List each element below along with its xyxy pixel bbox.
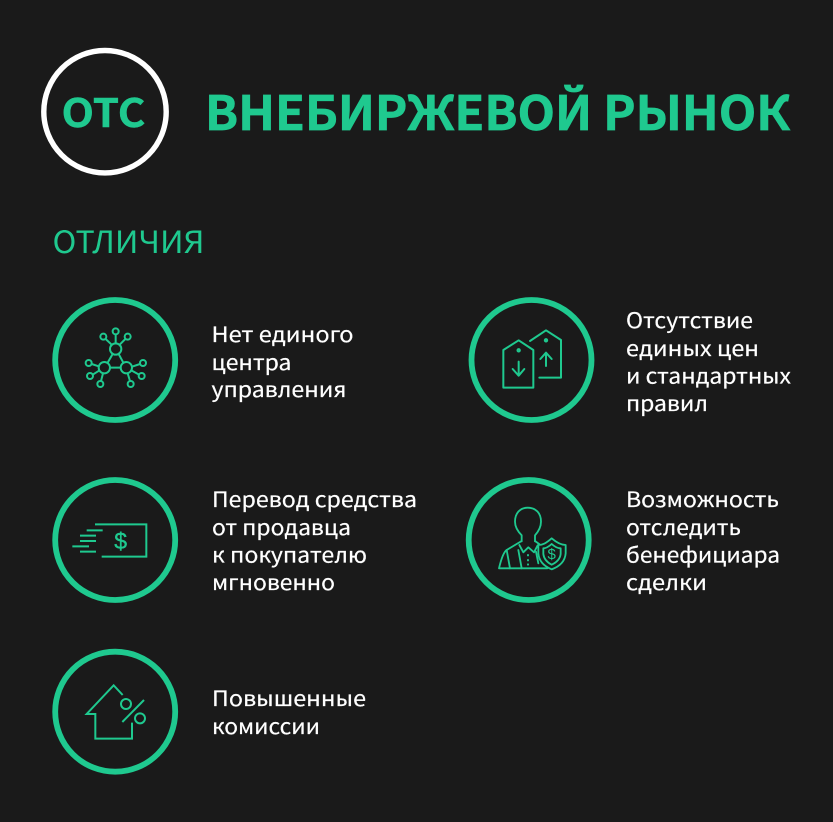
text: центра <box>212 347 292 377</box>
text: сделки <box>626 567 707 597</box>
icon: price tags <box>472 300 592 420</box>
item: higher fees <box>55 652 366 772</box>
item: instant transfer <box>55 480 417 600</box>
text: и стандартных <box>626 360 792 390</box>
text: отследить <box>626 512 741 542</box>
item: beneficiary tracking <box>469 480 780 600</box>
title: ВНЕБИРЖЕВОЙ РЫНОК <box>205 75 790 144</box>
text: к покупателю <box>212 540 367 570</box>
icon: flying banknote: $ <box>114 528 127 554</box>
text: от продавца <box>212 512 351 542</box>
logo: OTC badge: ОТС <box>62 83 146 139</box>
icon: person with shield <box>469 480 589 600</box>
icon: person with shield: $ <box>548 546 557 563</box>
text: правил <box>626 388 708 418</box>
item: no single control centre <box>55 300 353 420</box>
text: комиссии <box>212 711 320 741</box>
icon: network <box>55 300 175 420</box>
text: Нет единого <box>212 319 354 349</box>
logo: OTC badge <box>44 50 166 173</box>
text: Повышенные <box>212 683 366 713</box>
text: Отсутствие <box>626 305 753 335</box>
text: Перевод средства <box>212 484 417 514</box>
text: мгновенно <box>212 567 335 597</box>
icon: flying banknote <box>55 480 175 600</box>
section heading: ОТЛИЧИЯ <box>52 217 204 262</box>
text: бенефициара <box>626 540 780 570</box>
text: управления <box>212 374 346 404</box>
item: no unified prices <box>472 300 792 420</box>
text: Возможность <box>626 484 779 514</box>
text: единых цен <box>626 333 759 363</box>
icon: house with percent <box>55 652 175 772</box>
